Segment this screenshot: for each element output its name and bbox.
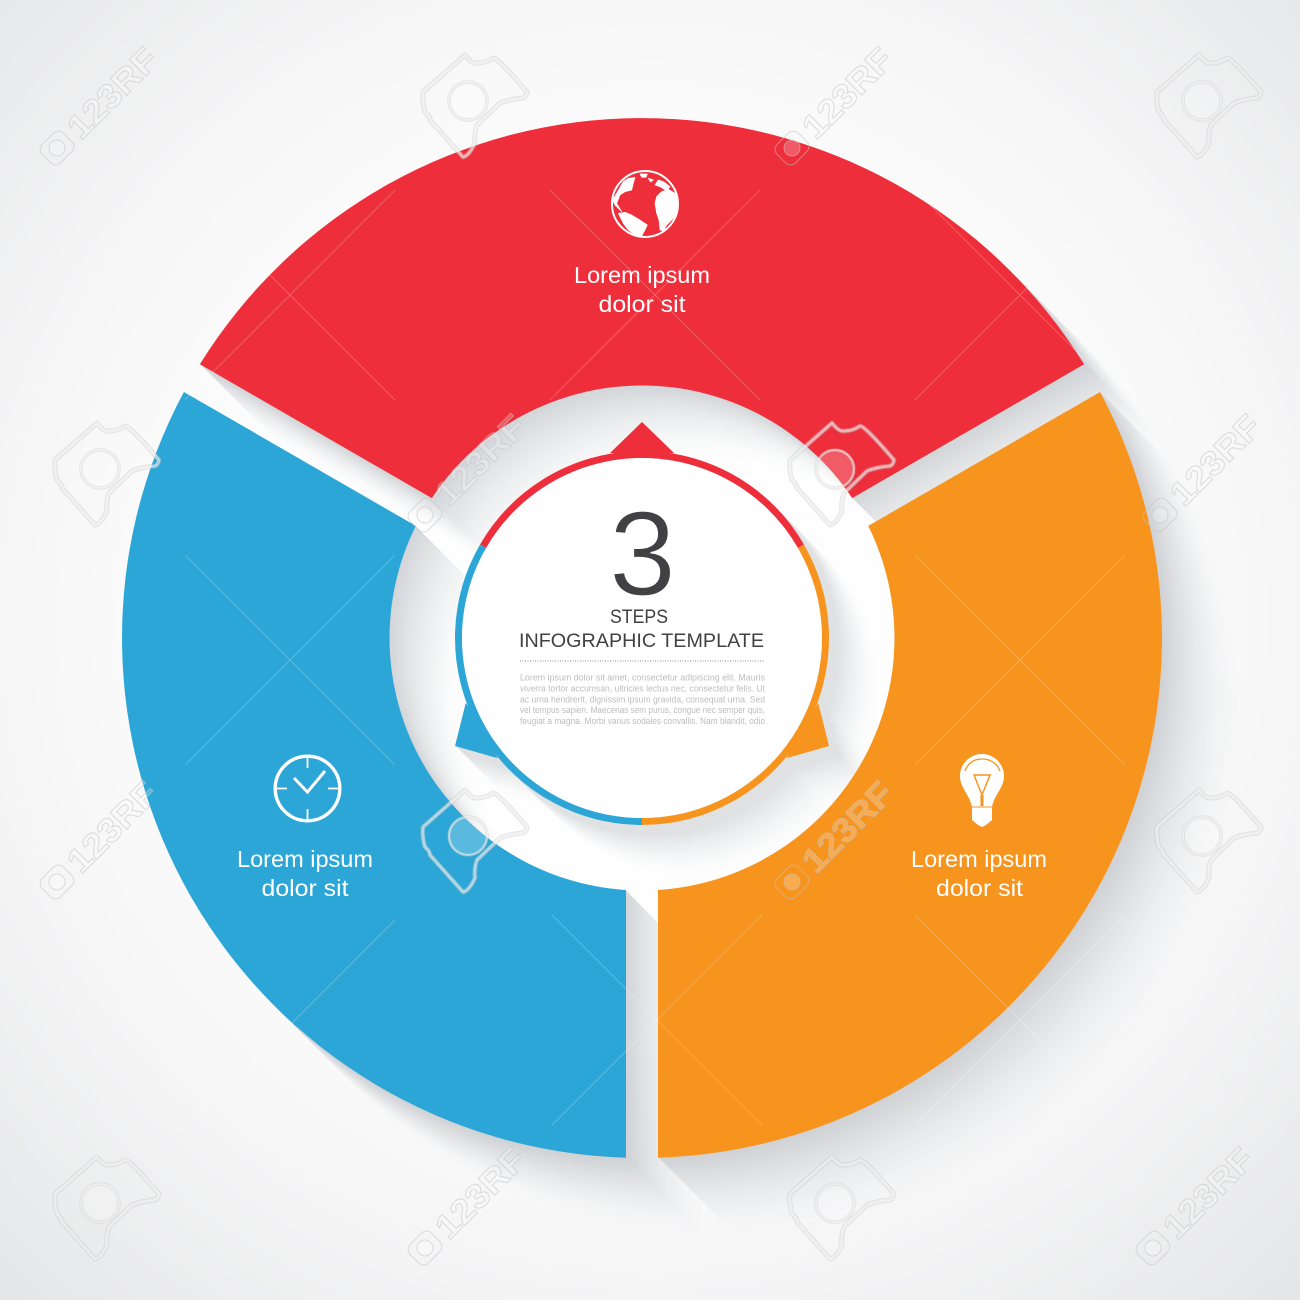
watermark overlay: 123RF [60,775,166,881]
ring: orange arc [642,546,825,822]
arrow: red pointer [610,422,674,453]
panel: red segment [200,118,1084,498]
label: red segment: Lorem ipsum [574,262,710,288]
body text: vel tempus sapien. Maecenas sem purus, congue nec semper quis, [520,705,765,716]
long shadow of center badge [457,424,879,875]
body text: ac urna hendrerit, dignissim ipsum gravida, consequat urna. Sed [520,694,765,706]
center badge [455,422,829,822]
watermark overlay: 123RF [1163,408,1269,514]
icon: light bulb [960,754,1004,827]
arrow: orange pointer [786,703,829,758]
ring: blue arc [459,546,642,822]
body text [520,672,765,727]
white disc [462,458,822,818]
icon: clock [275,756,340,821]
dotted divider [520,660,765,662]
ring: red arc [483,455,801,546]
watermark overlay: 123RF [60,41,166,147]
long shadows of segments [124,120,1237,1233]
heading: steps: STEPS [610,606,668,628]
label: orange segment [911,846,1047,901]
label: blue segment: dolor sit [262,875,349,901]
icon: globe [612,171,678,237]
label: blue segment: Lorem ipsum [237,846,373,872]
body text: Lorem ipsum dolor sit amet, consectetur adipiscing elit. Mauris [520,672,765,684]
body text: viverra tortor accumsan, ultricies lectus nec, consectetur felis. Ut [520,684,765,694]
watermark overlay: 123RF [1156,1141,1262,1247]
arrow: blue pointer [455,703,498,758]
label: blue segment [237,846,373,901]
panel: orange segment [658,392,1162,1158]
watermark overlay: 123RF [428,408,534,514]
label: red segment [574,262,710,317]
label: orange segment: dolor sit [936,875,1023,901]
panel: blue segment [122,392,626,1158]
watermark overlay: 123RF [795,775,901,881]
watermark overlay: 123RF [428,1141,534,1247]
label: red segment: dolor sit [598,291,686,317]
heading: infographic template: INFOGRAPHIC TEMPLATE [519,630,764,652]
label: orange segment: Lorem ipsum [911,846,1047,872]
body text: feugiat a magna. Morbi varius sodales convallis. Nam blandit, odio [520,716,765,727]
number 3: 3 [609,487,676,621]
watermark overlay: 123RF [795,41,901,147]
